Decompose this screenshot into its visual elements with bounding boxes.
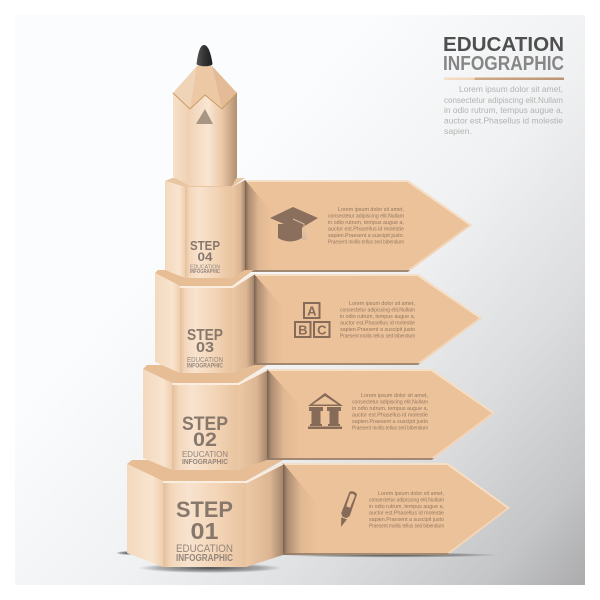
step 1 label [176, 497, 233, 564]
step 1 block [127, 460, 284, 567]
step 3 text [340, 301, 415, 340]
step 4 block [165, 178, 245, 278]
step 1 text [369, 491, 444, 530]
step 3 label: 03 [196, 340, 214, 356]
step 3 text: consectetur adipiscing elit.Nullam [340, 308, 415, 314]
pencil lead [196, 45, 212, 66]
icon: alphabet blocks: B [298, 322, 307, 338]
step 2 text [352, 393, 428, 432]
step 3 label: EDUCATION [187, 357, 223, 364]
step 3 arrow [254, 274, 482, 365]
step 1 text: Praesent mollis tellus sed bibendum [369, 524, 444, 530]
step 1 text: sapien.Praesent a suscipit justo [369, 517, 444, 523]
title divider [444, 78, 564, 80]
step 1 text: auctor est.Phasellus id molestie [369, 510, 444, 516]
pencil foot overlay [173, 172, 237, 186]
step 3 label: INFOGRAPHIC [187, 364, 224, 370]
step 2 arrow [267, 369, 495, 460]
pencil tip [173, 66, 237, 109]
intro text block [444, 84, 563, 136]
step 2 text: Lorem ipsum dolor sit amet, [361, 393, 428, 399]
icon: fountain pen [337, 490, 358, 528]
title: EDUCATION [443, 34, 564, 56]
step 1 text: in odio rutrum, tempus augue a, [369, 504, 444, 510]
intro text block: sapien. [444, 126, 472, 136]
icon: temple [308, 393, 343, 429]
step 4 label: 04 [198, 252, 213, 264]
step 2 label: INFOGRAPHIC [182, 457, 229, 466]
step 1 arrow [283, 463, 510, 555]
step 2 label: STEP [182, 413, 228, 435]
step 2 block [143, 365, 268, 470]
step 4 label [190, 239, 220, 275]
step 3 text: Praesent mollis tellus sed bibendum [340, 334, 415, 340]
step 2 text: sapien.Praesent a suscipit justo [352, 419, 428, 425]
step 1 label: INFOGRAPHIC [176, 553, 233, 564]
step 3 label [187, 327, 224, 370]
step 4 text [328, 207, 404, 246]
pencil triangle mark [196, 109, 213, 124]
step 4 arrow [245, 180, 472, 272]
step 2 label [182, 413, 229, 466]
step 4 label: EDUCATION [190, 264, 220, 270]
step 3 block [155, 270, 254, 373]
step 3 text: sapien.Praesent a suscipit justo [340, 327, 415, 333]
pencil body [173, 93, 237, 186]
step 4 text: auctor est.Phasellus id molestie [328, 226, 404, 232]
intro text block: in odio rutrum, tempus augue a, [444, 105, 563, 115]
step 2 text: auctor est.Phasellus id molestie [352, 412, 428, 418]
step 2 text: Praesent mollis tellus sed bibendum [352, 426, 428, 432]
step 4 text: Lorem ipsum dolor sit amet, [338, 207, 404, 213]
step 1 label: 01 [190, 518, 219, 544]
step 3 text: auctor est.Phasellus id molestie [340, 320, 415, 326]
step 1 label: EDUCATION [176, 543, 233, 555]
step 3 text: in odio rutrum, tempus augue a, [340, 314, 415, 320]
step 4 text: consectetur adipiscing elit.Nullam [328, 214, 404, 220]
icon: alphabet blocks: C [317, 322, 327, 338]
icon: alphabet blocks: A [307, 304, 317, 318]
step 1 text: consectetur adipiscing elit.Nullam [369, 498, 444, 504]
intro text block: Lorem ipsum dolor sit amet, [459, 84, 563, 94]
intro text block: auctor est.Phasellus id molestie [444, 116, 563, 126]
step 4 label: STEP [190, 239, 220, 253]
step 1 text: Lorem ipsum dolor sit amet, [378, 491, 444, 497]
step 4 text: sapien.Praesent a suscipit justo. [328, 233, 404, 239]
step 4 label: INFOGRAPHIC [190, 269, 220, 275]
step 2 text: consectetur adipiscing elit.Nullam [352, 400, 428, 406]
pencil [173, 45, 237, 186]
step 4 text: Praesent mollis tellus sed bibendum [328, 240, 404, 246]
intro text block: consectetur adipiscing elit.Nullam [444, 95, 563, 105]
icon: graduation cap [270, 207, 318, 242]
ground shadow [116, 551, 498, 573]
title [443, 34, 564, 75]
step 3 text: Lorem ipsum dolor sit amet, [349, 301, 415, 307]
step 4 text: in odio rutrum, tempus augue a, [328, 220, 404, 226]
step 2 label: EDUCATION [182, 449, 228, 459]
title: INFOGRAPHIC [443, 53, 564, 75]
step 3 label: STEP [187, 327, 223, 344]
step 2 text: in odio rutrum, tempus augue a, [352, 406, 428, 412]
step 1 label: STEP [176, 497, 233, 522]
step 2 label: 02 [193, 429, 217, 451]
icon: alphabet blocks [295, 303, 330, 338]
